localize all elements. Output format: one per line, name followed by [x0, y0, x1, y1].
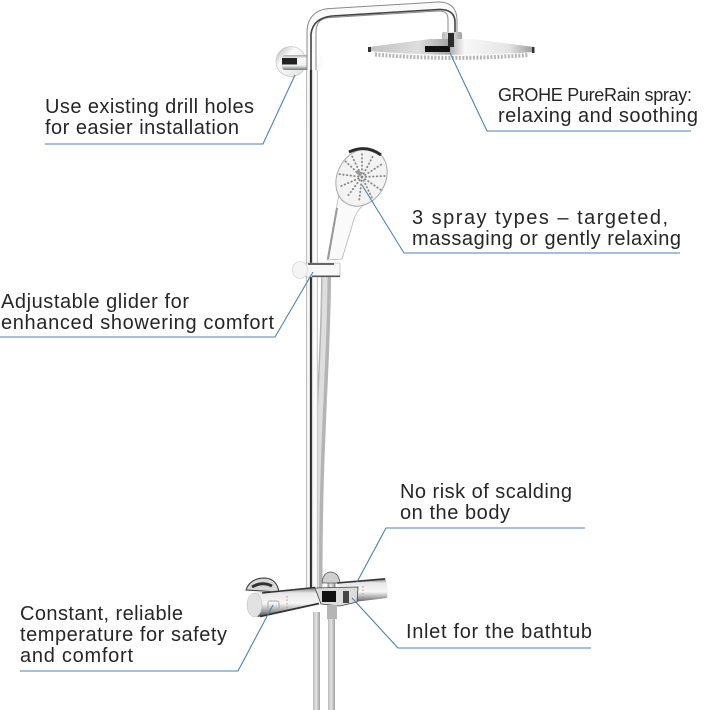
callout: constant temperature: Constant, reliable — [20, 603, 183, 625]
callout: drill holes: for easier installation — [45, 117, 239, 139]
callout: PureRain spray: relaxing and soothing — [498, 105, 698, 127]
hand shower — [326, 140, 397, 260]
rising pole and shower arm — [306, 6, 455, 590]
callout: no risk of scalding — [357, 481, 585, 582]
callout: PureRain spray — [450, 53, 698, 131]
callout: constant temperature: temperature for safety — [20, 624, 227, 646]
callout: constant temperature: and comfort — [20, 645, 133, 667]
callout: inlet for the bathtub: Inlet for the bathtub — [406, 621, 592, 643]
callout: drill holes — [45, 75, 295, 144]
overhead rain shower head — [368, 32, 534, 58]
callout: drill holes: Use existing drill holes — [45, 96, 254, 118]
callout: adjustable glider: Adjustable glider for — [1, 291, 189, 313]
callout: adjustable glider — [0, 272, 313, 337]
callout: 3 spray types: 3 spray types – targeted, — [412, 207, 668, 229]
callout: PureRain spray: GROHE PureRain spray: — [498, 85, 692, 105]
wall mount — [276, 46, 324, 76]
callout: 3 spray types: massaging or gently relaxing — [412, 228, 681, 250]
callout: 3 spray types — [362, 185, 681, 253]
hose to hand shower — [313, 276, 335, 710]
callout: no risk of scalding: No risk of scalding — [400, 481, 572, 503]
adjustable glider — [292, 262, 340, 278]
callout: inlet for the bathtub — [352, 598, 592, 648]
callout: no risk of scalding: on the body — [400, 502, 510, 524]
callout: constant temperature — [20, 603, 273, 671]
callout: adjustable glider: enhanced showering comfort — [1, 312, 274, 334]
thermostat mixer — [246, 572, 388, 619]
